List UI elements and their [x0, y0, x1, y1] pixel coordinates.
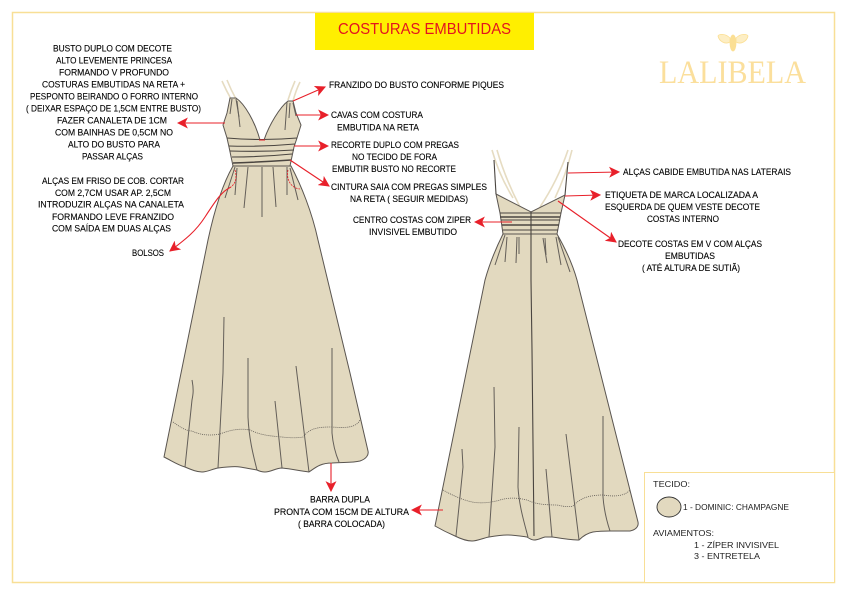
- back centre zip line: [531, 212, 534, 536]
- front bust gathers: [230, 99, 296, 130]
- label: double hem: BARRA DUPLA: [310, 494, 371, 506]
- panel: materials: [644, 472, 834, 582]
- arrow: back neckline: [558, 201, 616, 242]
- arrow: zipper: [475, 221, 512, 223]
- back dress: [435, 150, 638, 541]
- left annotation: bust: COM BAINHAS DE 0,5CM NO: [55, 128, 173, 138]
- pocket right dashes: [288, 170, 300, 189]
- arrow: label: [565, 195, 600, 196]
- label: back neckline: ( ATÉ ALTURA DE SUTIÃ): [642, 263, 740, 274]
- arrow: pockets: [170, 187, 231, 251]
- label: armhole: EMBUTIDA NA RETA: [337, 122, 420, 134]
- front hem pleats: [185, 317, 339, 472]
- left annotation: bust: COSTURAS EMBUTIDAS NA RETA +: [42, 80, 185, 90]
- arrow: armhole: [296, 114, 328, 116]
- back waist pleats: [495, 235, 570, 272]
- left annotation: bust: FORMANDO V PROFUNDO: [59, 68, 169, 78]
- left annotation: bust: PASSAR ALÇAS: [82, 152, 143, 162]
- brand logo: Lalibela with bee: LALIBELA: [659, 55, 806, 91]
- back waistband seams: [500, 213, 561, 230]
- trim list: [694, 540, 779, 561]
- label: zipper: INVISIVEL EMBUTIDO: [369, 227, 457, 238]
- left annotation: bust: ALTO LEVEMENTE PRINCESA: [56, 56, 173, 66]
- title banner: [315, 13, 534, 50]
- arrow: bust channel: [178, 122, 225, 124]
- arrow: bust gather: [293, 87, 325, 101]
- label: zipper: CENTRO COSTAS COM ZIPER: [353, 215, 471, 226]
- left annotation: straps: ALÇAS EM FRISO DE COB. CORTAR: [42, 176, 184, 187]
- arrow: hanger straps: [568, 172, 619, 173]
- label: brand tag: ESQUERDA DE QUEM VESTE DECOTE: [605, 202, 760, 213]
- fabric swatch: [657, 497, 681, 517]
- back strap edges: [494, 160, 568, 195]
- back hem stitching: [443, 490, 630, 507]
- label: back neckline: EMBUTIDAS: [665, 251, 715, 262]
- left annotation: straps: FORMANDO LEVE FRANZIDO: [52, 212, 174, 223]
- label: waist: [331, 182, 487, 205]
- annotation arrows: [170, 87, 619, 510]
- fabric heading: TECIDO:: [653, 480, 690, 489]
- back skirt: [435, 234, 638, 541]
- label: brand tag: ETIQUETA DE MARCA LOCALIZADA A: [605, 190, 759, 201]
- back hem pleats: [456, 387, 610, 540]
- front hem stitching: [173, 420, 360, 438]
- left annotation: bust: FAZER CANALETA DE 1CM: [57, 116, 167, 126]
- label: double hem: [274, 494, 410, 530]
- label: double hem: ( BARRA COLOCADA): [298, 519, 385, 530]
- label: brand tag: [605, 190, 760, 225]
- label: back neckline: [618, 239, 762, 274]
- front waist pleats: [225, 167, 298, 217]
- label: double seam: EMBUTIR BUSTO NO RECORTE: [332, 164, 456, 175]
- label: zipper: [353, 215, 471, 238]
- label: bust gather: FRANZIDO DO BUSTO CONFORME PIQUES: [329, 80, 504, 91]
- back bodice: [496, 194, 565, 234]
- label: waist: NA RETA ( SEGUIR MEDIDAS): [350, 194, 468, 205]
- label: double seam: [331, 140, 459, 175]
- left annotation: bust: PESPONTO BEIRANDO O FORRO INTERNO: [30, 92, 198, 102]
- label: double seam: NO TECIDO DE FORA: [352, 152, 438, 163]
- pocket left dashes: [231, 170, 236, 187]
- label: brand tag: COSTAS INTERNO: [647, 214, 719, 225]
- label: armhole: CAVAS COM COSTURA: [331, 110, 424, 121]
- label: double hem: PRONTA COM 15CM DE ALTURA: [274, 507, 410, 518]
- label: armhole: [331, 110, 424, 134]
- label: double seam: RECORTE DUPLO COM PREGAS: [331, 140, 459, 151]
- front straps: [222, 80, 300, 101]
- fabric name: 1 - DOMINIC: CHAMPAGNE: [683, 503, 789, 512]
- icon: bee: [718, 34, 748, 51]
- back straps: [492, 150, 572, 207]
- left annotation: straps: INTRODUZIR ALÇAS NA CANALETA: [38, 200, 185, 210]
- brand logo: Lalibela with bee: [659, 34, 806, 91]
- left annotation: bust: [26, 44, 201, 162]
- left annotation: bust: ( DEIXAR ESPAÇO DE 1,5CM ENTRE BUSTO): [26, 104, 201, 114]
- trims heading: AVIAMENTOS:: [653, 529, 714, 538]
- left annotation: straps: [38, 176, 185, 234]
- label: hanger straps: ALÇAS CABIDE EMBUTIDA NAS LATERAIS: [623, 167, 791, 178]
- left annotation: bust: ALTO DO BUSTO PARA: [68, 140, 161, 150]
- front bodice: [223, 98, 301, 166]
- arrow: waist: [290, 160, 329, 186]
- label: pockets: BOLSOS: [132, 248, 164, 259]
- title banner: COSTURAS EMBUTIDAS: [338, 21, 511, 38]
- trim list: 3 - ENTRETELA: [694, 551, 760, 561]
- arrow: double seam: [294, 145, 328, 147]
- front waistband seams: [227, 138, 297, 163]
- front skirt: [164, 166, 368, 472]
- left annotation: straps: COM SAÍDA EM DUAS ALÇAS: [52, 224, 171, 234]
- arrow: double hem: [330, 463, 332, 491]
- left annotation: bust: BUSTO DUPLO COM DECOTE: [53, 44, 172, 54]
- trim list: 1 - ZÍPER INVISIVEL: [694, 540, 779, 550]
- left annotation: straps: COM 2,7CM USAR AP. 2,5CM: [55, 188, 171, 199]
- label: waist: CINTURA SAIA COM PREGAS SIMPLES: [331, 182, 487, 193]
- front dress: [164, 80, 368, 472]
- label: back neckline: DECOTE COSTAS EM V COM ALÇAS: [618, 239, 762, 250]
- arrow: hem back: [412, 509, 443, 511]
- neckline tick: [259, 139, 265, 141]
